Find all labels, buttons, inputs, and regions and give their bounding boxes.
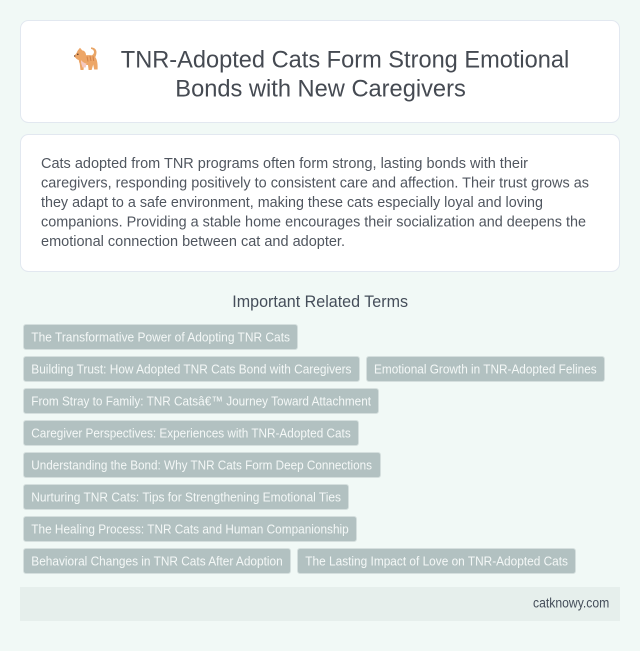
tag bbox=[24, 484, 348, 510]
title: TNR-Adopted Cats Form Strong Emotional bbox=[121, 46, 569, 74]
tag bbox=[24, 452, 380, 478]
tag bbox=[298, 548, 576, 574]
tag: From Stray to Family: TNR Catsâ€™ Journey Toward Attachment bbox=[31, 394, 371, 408]
tag bbox=[24, 388, 378, 414]
tag: Emotional Growth in TNR-Adopted Felines bbox=[374, 362, 597, 376]
tag: The Transformative Power of Adopting TNR Cats bbox=[31, 330, 290, 344]
tag bbox=[24, 548, 290, 574]
text block: description bbox=[41, 155, 589, 250]
text block: description: caregivers, responding positively to consistent care and affection. Their trust grows as bbox=[41, 174, 589, 192]
tag: Nurturing TNR Cats: Tips for Strengthening Emotional Ties bbox=[31, 490, 341, 504]
heading: important related terms: Important Related Terms bbox=[232, 293, 408, 311]
text block: description: companions. Providing a stable home encourages their socialization and deepens the bbox=[41, 214, 586, 230]
panel: title card bbox=[20, 20, 620, 122]
text block: description: Cats adopted from TNR programs often form strong, lasting bonds with their bbox=[41, 155, 528, 172]
tag: Caregiver Perspectives: Experiences with TNR-Adopted Cats bbox=[31, 426, 351, 440]
tag bbox=[24, 356, 360, 382]
text block: description: emotional connection between cat and adopter. bbox=[41, 233, 345, 250]
tag: The Lasting Impact of Love on TNR-Adopted Cats bbox=[305, 554, 568, 568]
footer: catknowy.com bbox=[533, 596, 609, 611]
tag bbox=[24, 324, 298, 350]
title: Bonds with New Caregivers bbox=[175, 76, 466, 102]
title bbox=[121, 46, 569, 102]
text block: description: they adapt to a safe environment, making these cats especially loyal and loving bbox=[41, 194, 543, 211]
tag: Understanding the Bond: Why TNR Cats Form Deep Connections bbox=[31, 458, 372, 472]
tag bbox=[24, 516, 356, 542]
tag: Building Trust: How Adopted TNR Cats Bond with Caregivers bbox=[31, 362, 352, 376]
tag bbox=[366, 356, 604, 382]
tag list bbox=[24, 324, 604, 574]
tag: Behavioral Changes in TNR Cats After Adoption bbox=[31, 554, 283, 568]
icon: orange cat bbox=[74, 47, 98, 70]
tag: The Healing Process: TNR Cats and Human Companionship bbox=[31, 522, 349, 536]
footer bbox=[20, 587, 620, 621]
tag bbox=[24, 420, 358, 446]
panel: description card bbox=[20, 134, 620, 272]
